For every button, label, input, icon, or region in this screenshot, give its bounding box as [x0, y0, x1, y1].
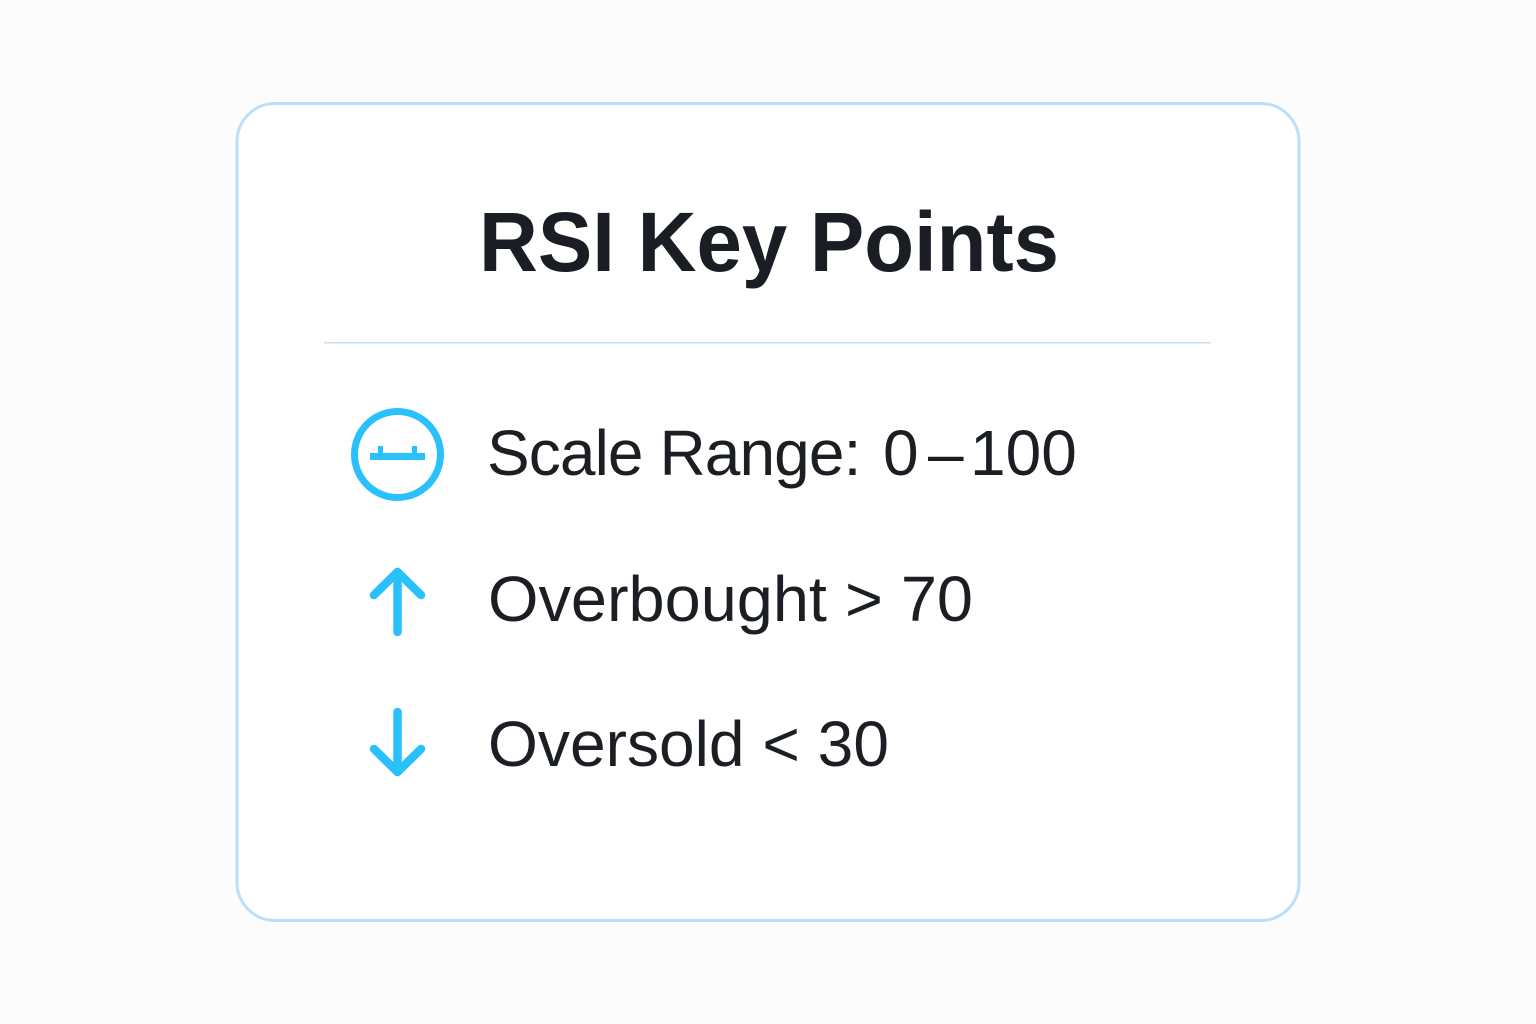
- icon: up arrow: [374, 572, 421, 632]
- text: scale range: Scale Range:: [487, 417, 877, 489]
- row: oversold: [374, 708, 889, 780]
- text: scale range: 0: [883, 417, 919, 489]
- text: oversold: Oversold < 30: [488, 708, 889, 780]
- row: scale range: [354, 412, 1077, 498]
- icon: down arrow: [374, 712, 421, 772]
- text: scale range: –: [928, 417, 964, 489]
- icon: scale gauge: [354, 412, 440, 498]
- panel: RSI key points card: [237, 104, 1299, 920]
- text: overbought: Overbought > 70: [488, 563, 973, 635]
- row: overbought: [374, 563, 973, 635]
- title: RSI Key Points: [479, 195, 1059, 289]
- text: scale range: 100: [970, 417, 1077, 489]
